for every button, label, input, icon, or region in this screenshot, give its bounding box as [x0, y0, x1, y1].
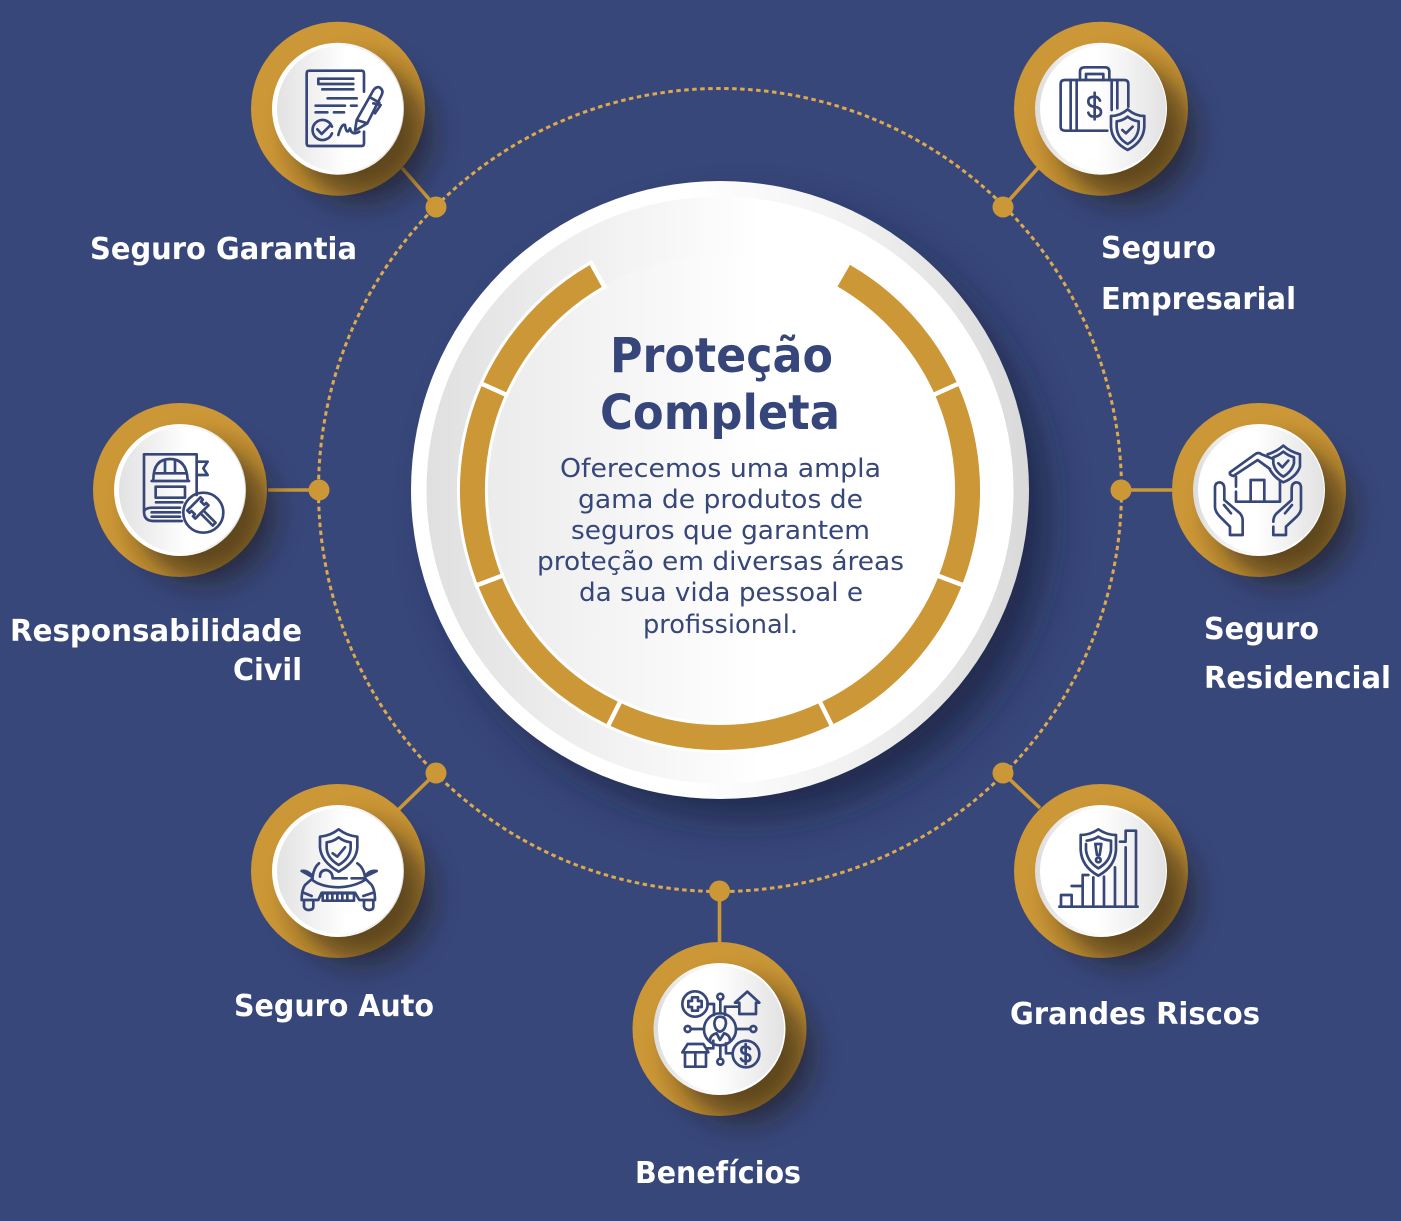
icon: briefcase and shield — [1061, 67, 1144, 150]
icon: rising bars and shield — [1059, 829, 1138, 907]
label: Seguro Residencial: Seguro — [1204, 612, 1319, 647]
description text: Oferecemos uma ampla — [560, 454, 881, 484]
description text — [537, 454, 904, 640]
title: Completa — [600, 385, 840, 441]
badge: Grandes Riscos — [1014, 784, 1193, 963]
description text: profissional. — [643, 610, 798, 640]
badge: Seguro Empresarial — [1014, 22, 1193, 201]
badge: Seguro Garantia — [251, 22, 430, 201]
description text: proteção em diversas áreas — [537, 547, 904, 577]
badge: Responsabilidade Civil — [93, 403, 272, 582]
label: Seguro Residencial: Residencial — [1204, 661, 1391, 696]
icon: house in hands — [1215, 446, 1301, 535]
badge: Seguro Auto — [251, 784, 430, 963]
badge: Benefícios — [632, 942, 811, 1121]
label: Seguro Empresarial: Empresarial — [1101, 282, 1296, 317]
icon: car and shield — [302, 829, 377, 910]
label: Benefícios: Benefícios — [635, 1156, 801, 1191]
title — [600, 328, 840, 441]
ring separators — [475, 261, 965, 728]
label: Responsabilidade Civil: Civil — [233, 653, 302, 688]
central disc — [411, 181, 1047, 817]
icon: benefits network — [682, 991, 759, 1067]
label: Responsabilidade Civil — [10, 614, 302, 688]
description text: da sua vida pessoal e — [579, 578, 863, 608]
gold segmented ring — [473, 276, 968, 738]
description text: gama de produtos de — [578, 485, 863, 515]
label: Grandes Riscos: Grandes Riscos — [1010, 997, 1260, 1032]
description text: seguros que garantem — [571, 516, 870, 546]
icon: book helmet and gavel — [144, 454, 223, 533]
dotted orbit ring — [318, 88, 1122, 892]
badge: Seguro Residencial — [1172, 403, 1351, 582]
label: Responsabilidade Civil: Responsabilidade — [10, 614, 302, 649]
label: Seguro Empresarial: Seguro — [1101, 231, 1216, 266]
connector nodes — [308, 196, 1132, 902]
connectors — [268, 168, 1172, 942]
ring white outline — [473, 276, 968, 738]
icon: signed contract — [307, 71, 382, 146]
label: Seguro Garantia: Seguro Garantia — [90, 232, 357, 267]
label: Seguro Residencial — [1204, 612, 1391, 696]
title: Proteção — [610, 328, 833, 384]
label: Seguro Empresarial — [1101, 231, 1296, 317]
label: Seguro Auto: Seguro Auto — [234, 989, 434, 1024]
